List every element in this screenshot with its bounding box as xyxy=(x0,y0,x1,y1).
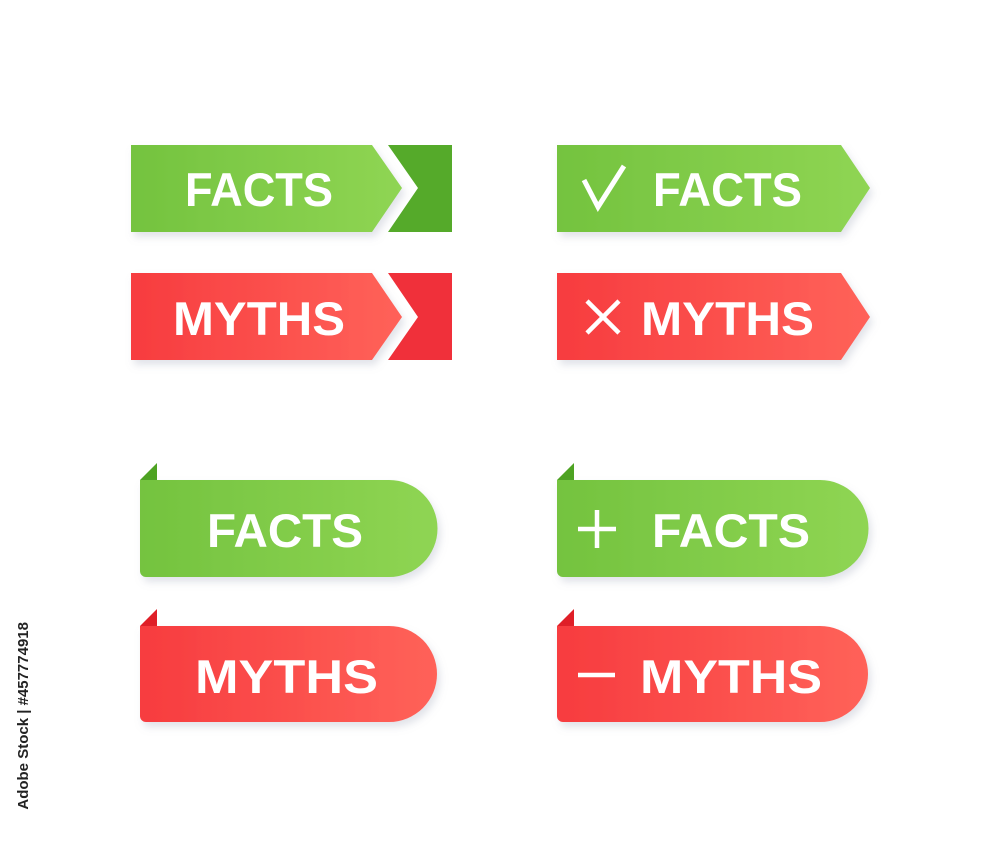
badge: facts arrow with block xyxy=(131,145,452,232)
badge: facts with check xyxy=(557,145,870,232)
stock id vertical text: Adobe Stock | #457774918 xyxy=(15,622,32,810)
badge: facts ribbon: FACTS xyxy=(207,504,363,557)
icon: cross xyxy=(587,301,619,333)
badge: facts arrow with block: FACTS xyxy=(185,163,333,216)
badge: myths arrow with block: MYTHS xyxy=(173,292,345,345)
badge: myths ribbon with minus: MYTHS xyxy=(640,650,822,703)
badge: myths ribbon with minus xyxy=(557,609,868,722)
badge: myths with cross: MYTHS xyxy=(641,292,814,345)
badge: myths arrow with block xyxy=(131,273,452,360)
icon: check mark xyxy=(584,166,624,207)
badge: myths ribbon: MYTHS xyxy=(195,650,378,703)
icon: minus xyxy=(578,673,615,677)
badge: facts with check: FACTS xyxy=(653,163,802,216)
badge: myths with cross xyxy=(557,273,870,360)
badge: facts ribbon with plus xyxy=(557,463,868,577)
badge: facts ribbon xyxy=(140,463,438,577)
badge: myths ribbon xyxy=(140,609,437,722)
icon: plus xyxy=(578,510,616,548)
badge: facts ribbon with plus: FACTS xyxy=(652,504,810,557)
